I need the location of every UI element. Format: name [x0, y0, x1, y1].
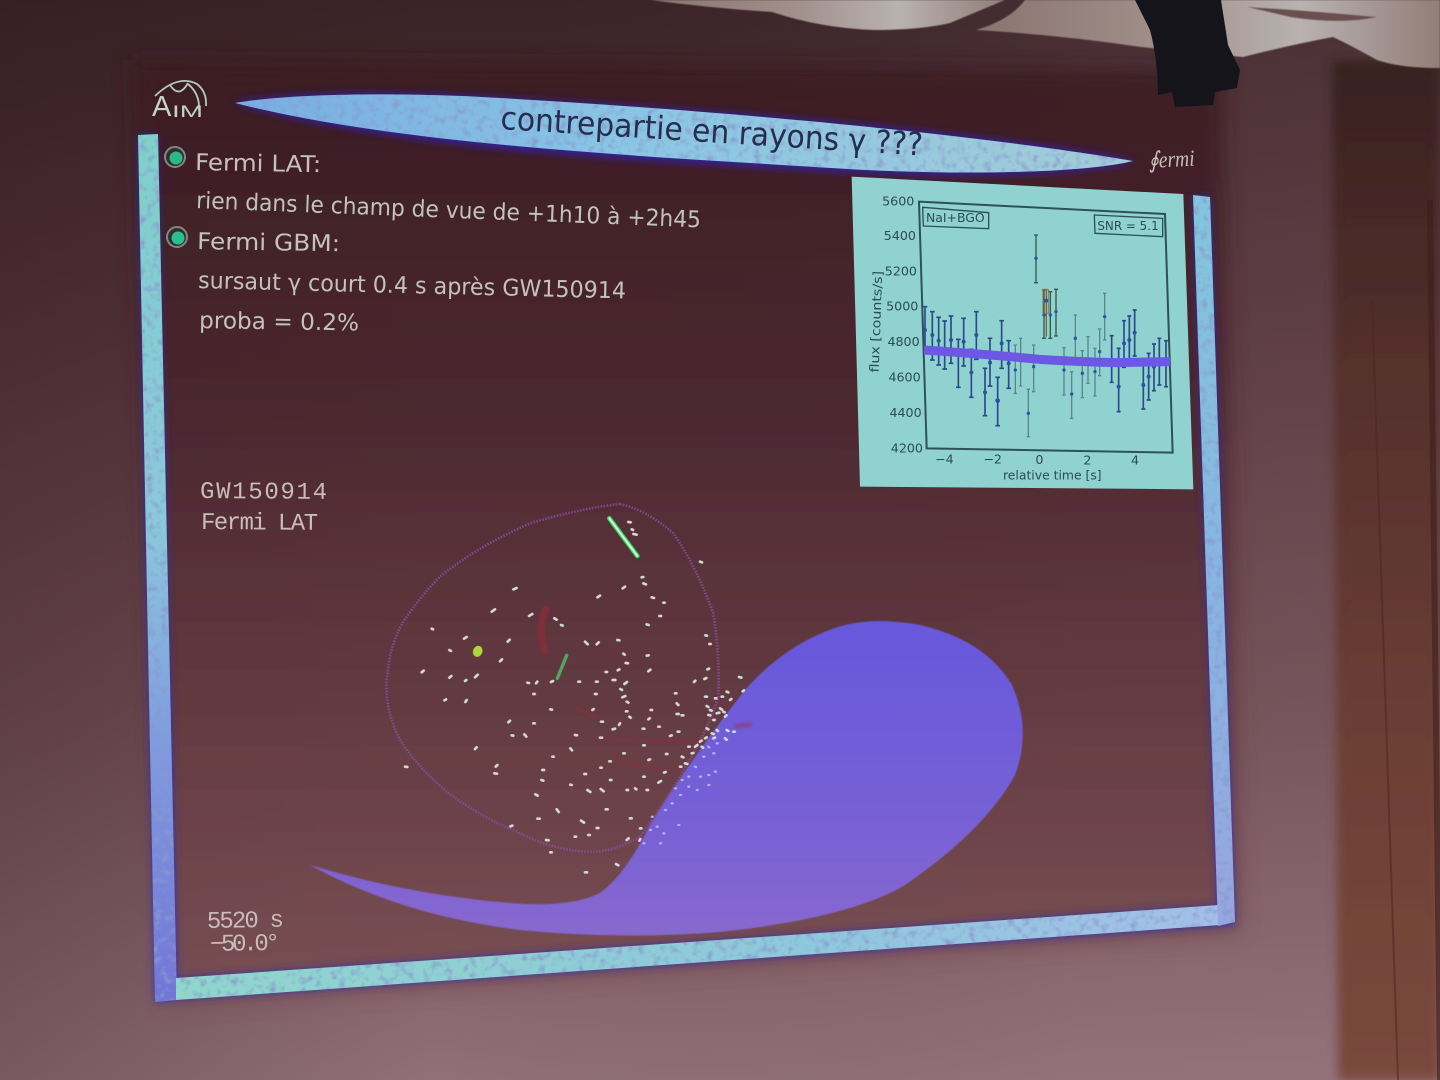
blue error bars right [1110, 310, 1168, 412]
data points [923, 257, 1156, 415]
y axis ticks: 5200 [885, 263, 917, 278]
y axis ticks: 4800 [887, 334, 920, 349]
probability: proba = 0.2% [199, 308, 359, 337]
bright green track [609, 518, 637, 556]
time and angle readout: −50.0° [210, 931, 280, 959]
bullet 1 [165, 147, 185, 167]
x axis ticks: 2 [1083, 453, 1091, 468]
label NaI+BGO [923, 207, 989, 229]
x axis ticks: −2 [983, 451, 1002, 466]
right curtain [1332, 60, 1440, 1080]
x axis ticks: 0 [1035, 452, 1043, 467]
bullet 2 [167, 227, 187, 247]
y axis ticks: 5400 [884, 228, 916, 243]
black projector strap [1135, 0, 1240, 107]
sky map overlay [386, 504, 750, 872]
logo: AIM: A [152, 91, 172, 123]
right bar [1193, 195, 1235, 926]
field of view ring [386, 504, 719, 852]
y axis ticks: 4600 [888, 369, 921, 384]
logo: AIM: IM [172, 102, 203, 121]
projected dark screen area [132, 60, 1240, 1006]
time and angle readout [207, 908, 284, 959]
x axis ticks: 4 [1131, 453, 1139, 468]
frame glow [138, 135, 1235, 1002]
title: contrepartie en rayons γ ??? [499, 99, 924, 164]
Fermi GBM detail: sursaut γ court 0.4 s après GW150914 [198, 268, 626, 304]
background fit band [924, 350, 1170, 363]
y axis ticks: 5000 [886, 299, 918, 314]
red traces [541, 609, 750, 770]
Fermi LAT detail: rien dans le champ de vue de +1h10 à +2h45 [196, 188, 701, 233]
plot frame [919, 202, 1173, 453]
animation label [200, 479, 327, 538]
yellow source [471, 644, 484, 658]
small green track [557, 655, 567, 678]
y axis ticks: 4400 [889, 405, 922, 420]
animation label: Fermi LAT [201, 510, 318, 538]
x axis ticks: −4 [935, 451, 954, 466]
logo: AIM [152, 81, 206, 123]
title banner [233, 93, 1136, 175]
slide frame [138, 134, 1235, 1002]
photon events [405, 522, 744, 872]
blue sky exclusion region [310, 621, 1023, 936]
burst error bars [1034, 235, 1058, 338]
bottom bar [176, 905, 1220, 1000]
logo: Fermi: ∮ermi [1148, 146, 1195, 173]
bullet text block [165, 147, 701, 337]
label NaI+BGO: NaI+BGO [926, 210, 985, 225]
label SNR: SNR = 5.1 [1097, 218, 1159, 233]
y axis ticks: 5600 [882, 193, 914, 208]
faded error bars centre [1014, 293, 1106, 437]
flux light-curve chart [852, 177, 1193, 489]
y axis title: flux [counts/s] [867, 271, 885, 373]
animation label: GW150914 [200, 479, 327, 507]
y axis ticks: 4200 [891, 440, 923, 455]
x axis title: relative time [s] [1003, 467, 1102, 482]
Fermi LAT heading: Fermi LAT: [195, 150, 321, 178]
ceiling drapes [650, 0, 1440, 68]
left bar [138, 134, 177, 1002]
Fermi GBM heading: Fermi GBM: [197, 229, 340, 257]
blue error bars left [923, 307, 1011, 426]
label SNR [1094, 215, 1163, 237]
y axis ticks [882, 193, 923, 455]
time and angle readout: 5520 s [207, 908, 284, 936]
x axis ticks [935, 451, 1139, 468]
events over blue region [643, 743, 718, 843]
